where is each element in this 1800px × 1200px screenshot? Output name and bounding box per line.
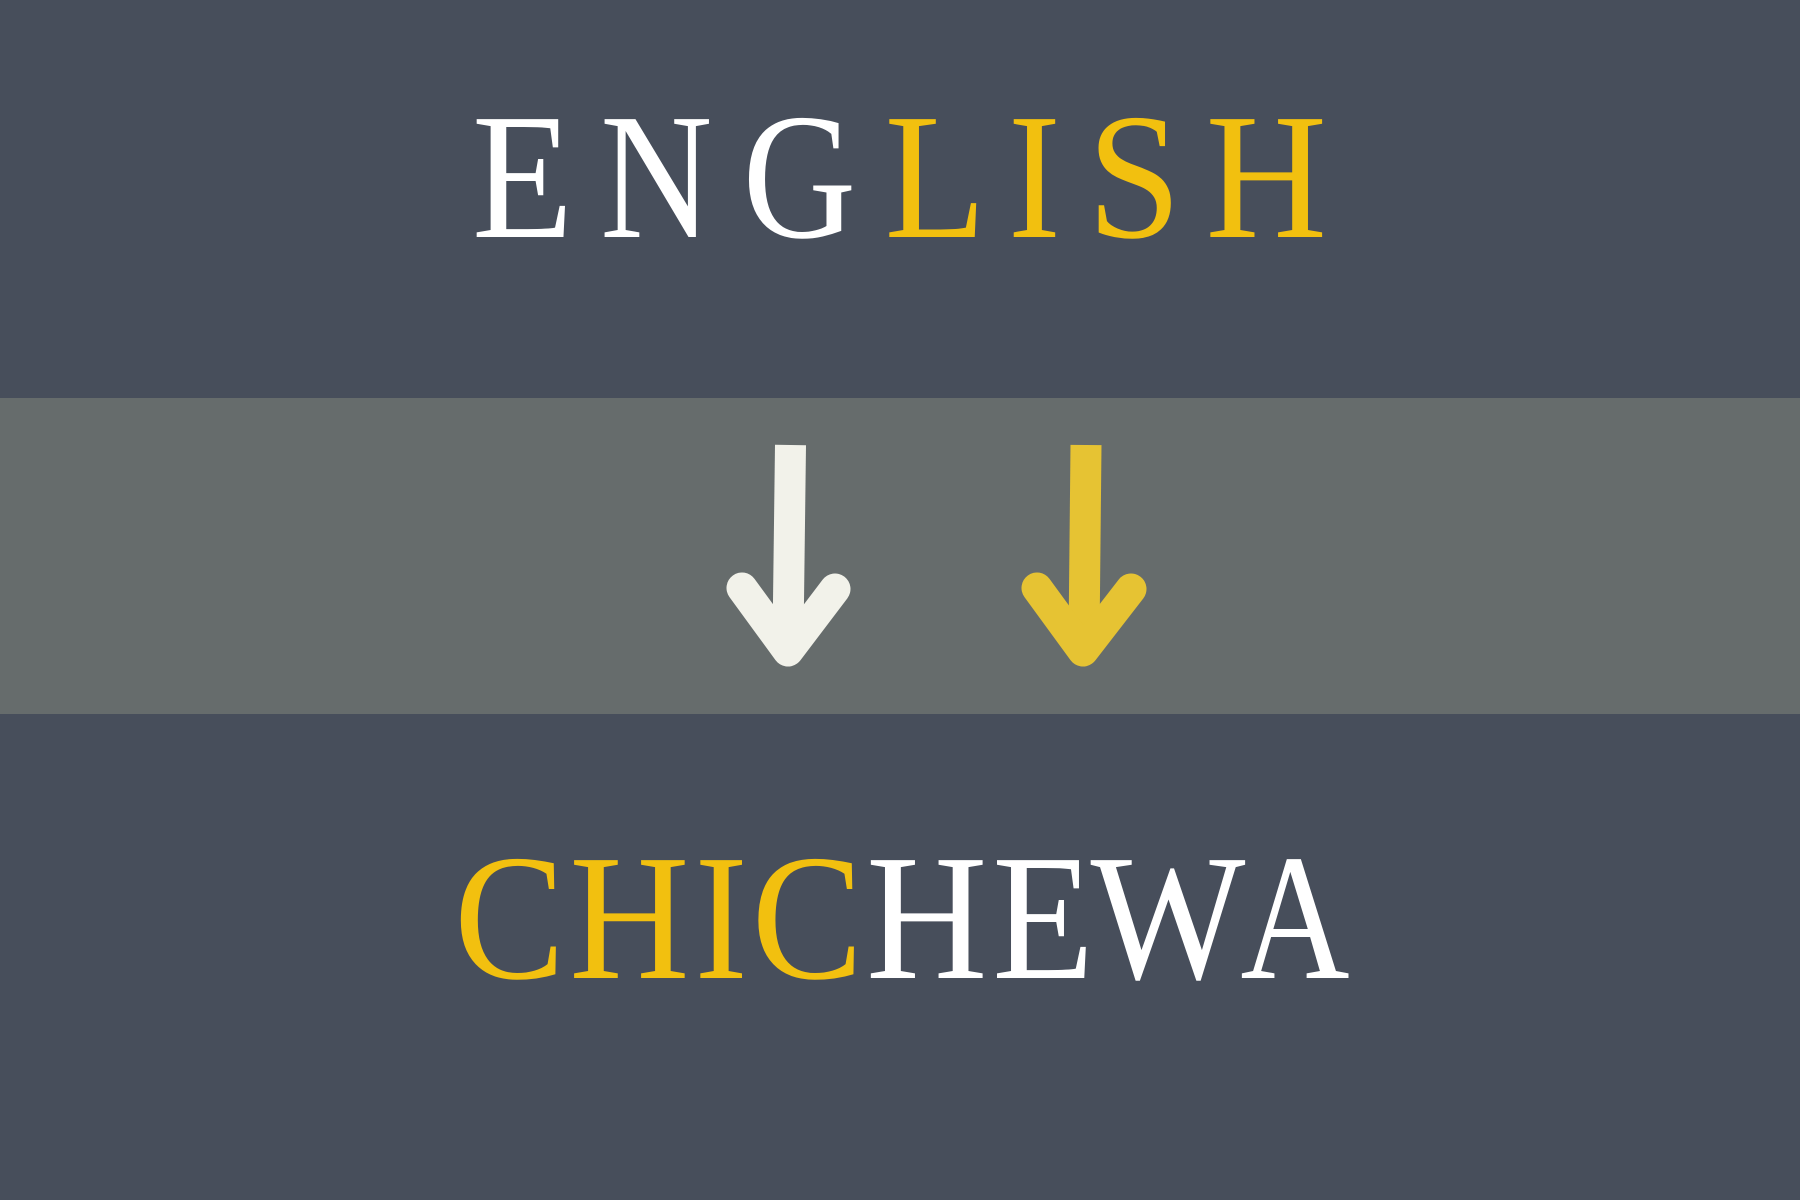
panel: bottom background: [0, 714, 1800, 1200]
panel: top background: [0, 0, 1800, 398]
heading: CHICHEWA: C: [454, 817, 565, 1017]
arrow: yellow, from shared letters: [1037, 445, 1131, 651]
heading: CHICHEWA: [454, 817, 1350, 1018]
panel: middle arrow band: [0, 398, 1800, 714]
heading: ENGLISH: L: [884, 76, 986, 276]
heading: CHICHEWA: A: [1240, 818, 1350, 1017]
heading: ENGLISH: I: [1008, 77, 1061, 276]
heading: CHICHEWA: E: [992, 817, 1094, 1017]
arrow: white, from English letters: [742, 445, 835, 651]
heading: ENGLISH: H: [1206, 77, 1327, 276]
heading: ENGLISH: G: [742, 76, 856, 276]
heading: ENGLISH: S: [1087, 76, 1181, 276]
heading: ENGLISH: E: [472, 78, 573, 277]
heading: ENGLISH: [472, 76, 1327, 277]
heading: CHICHEWA: I: [695, 818, 748, 1017]
heading: CHICHEWA: C: [752, 817, 863, 1017]
heading: CHICHEWA: W: [1090, 818, 1246, 1018]
heading: CHICHEWA: H: [866, 818, 988, 1017]
heading: CHICHEWA: H: [569, 817, 690, 1017]
heading: ENGLISH: N: [600, 78, 713, 277]
